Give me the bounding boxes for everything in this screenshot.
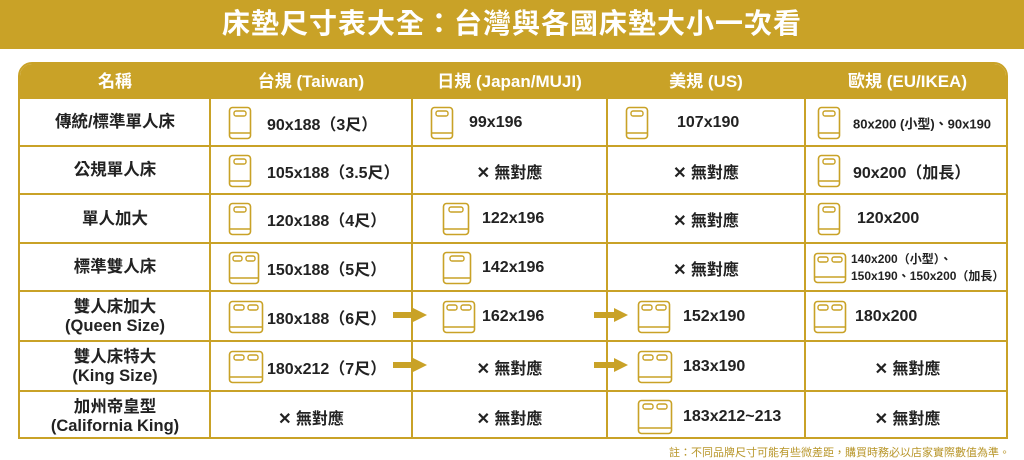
row 6: 雙人床特大 [74, 348, 156, 366]
table: 180x212（7尺） [267, 360, 386, 378]
row 2: 公規單人床 [74, 161, 156, 179]
row 7: (California King) [51, 416, 179, 434]
table: 150x188（5尺） [267, 262, 386, 278]
table: 122x196 [482, 210, 544, 227]
header row [20, 64, 1010, 99]
table: 120x188（4尺） [267, 213, 386, 230]
table: ✕ 無對應 [673, 262, 739, 278]
row 5: 雙人床加大 [74, 298, 156, 316]
table: 183x212~213 [683, 408, 781, 424]
table [18, 62, 1008, 439]
table: ✕ 無對應 [673, 213, 739, 230]
title: 床墊尺寸表大全：台灣與各國床墊大小一次看 [222, 8, 802, 39]
table: 180x188（6尺） [267, 310, 386, 328]
row 5 [65, 298, 165, 334]
table: 90x200（加長） [853, 164, 970, 182]
table: ✕ 無對應 [673, 164, 739, 182]
table: ✕ 無對應 [875, 410, 940, 428]
table: 99x196 [469, 114, 522, 130]
table: ✕ 無對應 [278, 410, 344, 428]
arrow: Japan to US queen [594, 308, 628, 322]
table: 80x200 (小型)、90x190 [853, 116, 991, 131]
table: 140x200（小型）、 [851, 252, 952, 266]
table: 142x196 [482, 258, 544, 276]
table: 150x190、150x200（加長） [851, 268, 1004, 282]
table: ✕ 無對應 [477, 360, 542, 378]
table: 152x190 [683, 308, 745, 324]
table: 162x196 [482, 308, 544, 324]
table: 107x190 [677, 114, 739, 130]
row 3: 單人加大 [82, 210, 148, 228]
table: 105x188（3.5尺） [267, 164, 400, 182]
row 1: 傳統/標準單人床 [55, 113, 175, 131]
table: ✕ 無對應 [477, 164, 542, 182]
row 7: 加州帝皇型 [74, 398, 156, 416]
row 6 [72, 348, 158, 384]
row 4: 標準雙人床 [74, 258, 156, 276]
footnote: 註：不同品牌尺寸可能有些微差距，購買時務必以店家實際數值為準。 [669, 447, 1010, 459]
header row: 名稱 [98, 72, 132, 91]
header row: 日規 (Japan/MUJI) [437, 72, 582, 91]
table: ✕ 無對應 [875, 360, 940, 378]
table: 120x200 [857, 210, 919, 227]
header row: 美規 (US) [669, 72, 743, 91]
table: 180x200 [855, 308, 917, 324]
header row: 台規 (Taiwan) [258, 72, 364, 91]
arrow: Japan to US king [594, 358, 628, 372]
arrow: Taiwan to Japan king [393, 358, 427, 372]
row 5: (Queen Size) [65, 316, 165, 334]
title [0, 0, 1024, 49]
header row: 歐規 (EU/IKEA) [848, 72, 967, 91]
table: 90x188（3尺） [267, 116, 377, 134]
row 7 [51, 398, 179, 434]
arrow: Taiwan to Japan queen [393, 308, 427, 322]
row 6: (King Size) [72, 366, 158, 384]
table: 183x190 [683, 358, 745, 374]
table: ✕ 無對應 [477, 410, 542, 428]
